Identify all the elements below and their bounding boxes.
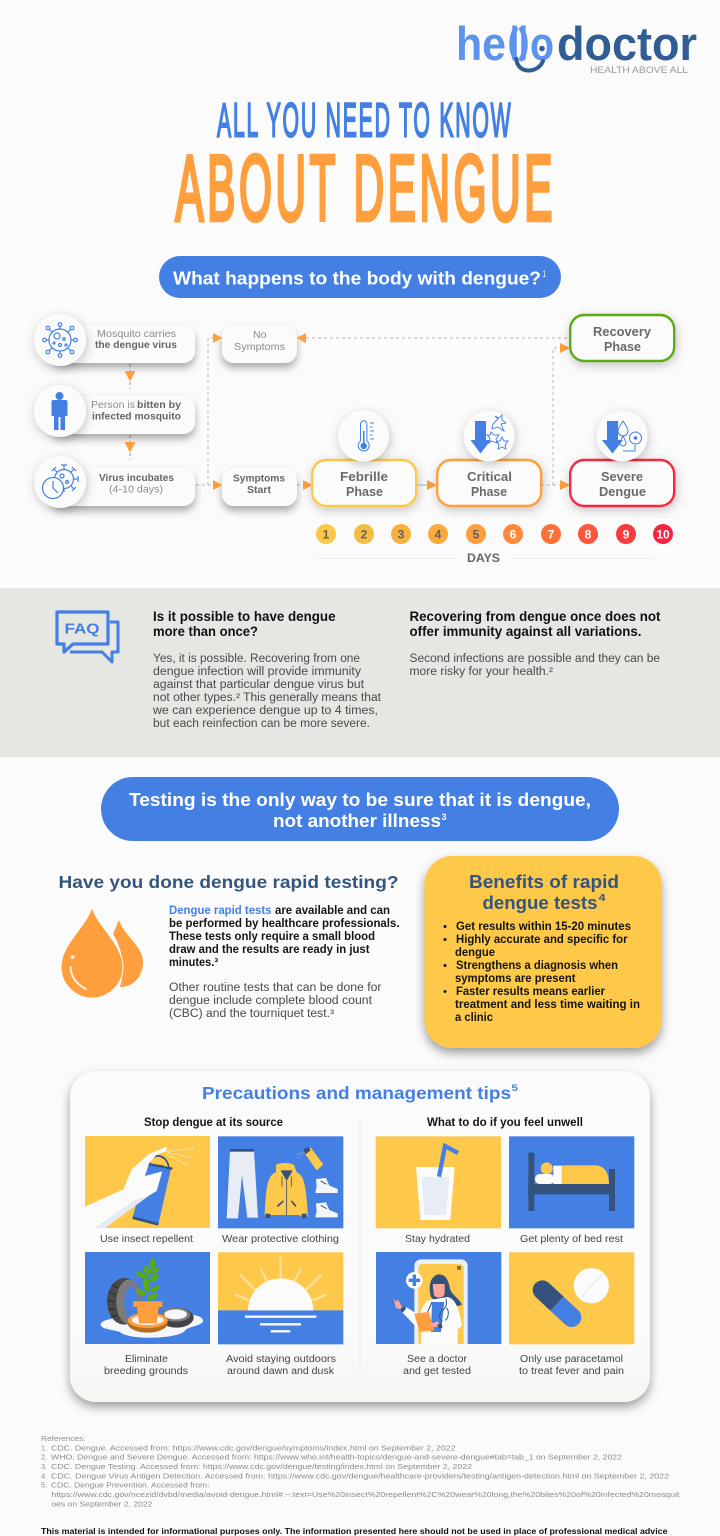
tile: breeding grounds [85, 1252, 210, 1377]
panel: FAQ [0, 588, 720, 757]
icon: FAQ speech bubbles [57, 612, 118, 662]
bullet list: Faster results means earlier [456, 986, 606, 998]
icon: person [52, 392, 68, 430]
heading: rapid testing: Have you done dengue rapid testing? [58, 872, 398, 892]
subheading: feel unwell: What to do if you feel unwell [427, 1117, 583, 1129]
text: rapid tests description: Dengue rapid tests [169, 905, 272, 917]
heading pill: what happens to the body [159, 256, 561, 298]
flowchart: connectors and arrows [130, 338, 570, 485]
FAQ question text: we can experience dengue up to 4 times, [152, 705, 378, 717]
text: rapid tests description [169, 905, 400, 1020]
bullet list: Strengthens a diagnosis when [456, 960, 618, 972]
references: https://www.cdc.gov/ncezid/dvbd/media/avoid-dengue.html#:~:text=Use%20insect%20repellent%2C%20wear%20long,the%20bites%20of%20infected%20mosquit [51, 1490, 680, 1499]
tile: bed rest: Get plenty of bed rest [520, 1233, 623, 1245]
references: CDC. Dengue. Accessed from: https://www.cdc.gov/dengue/symptoms/index.html on September 2, 2022 [51, 1443, 456, 1452]
card: person bitten: infected mosquito [92, 410, 181, 422]
logo: hellodoctor [456, 17, 697, 76]
text: rapid tests description: Other routine tests that can be done for [169, 982, 382, 994]
heading pill: what happens to the body: 1 [542, 269, 546, 279]
tile: paracetamol [509, 1252, 634, 1377]
days timeline [316, 524, 673, 565]
references: WHO. Dengue and Severe Dengue. Accessed from: https://www.who.int/health-topics/dengue-and-severe-dengue#tab=tab_1 on September 2, 2022 [51, 1453, 622, 1462]
FAQ answer text: offer immunity against all variations. [410, 624, 642, 639]
box: severe dengue: Severe [601, 469, 643, 484]
FAQ question text: against that particular dengue virus but [153, 679, 365, 691]
arrows: orange flow heads [213, 333, 570, 490]
tile: paracetamol: Only use paracetamol [520, 1353, 623, 1365]
days timeline: 2 [361, 527, 368, 541]
heading: precautions: 5 [512, 1083, 519, 1094]
disclaimer: This material is intended for informational purposes only. The information presented here should not be used in place of professional medical advice [41, 1526, 668, 1536]
tile: stay hydrated: Stay hydrated [405, 1233, 470, 1245]
heading pill: testing: 3 [442, 812, 446, 822]
days timeline: 3 [398, 527, 405, 541]
card: virus incubates: (4-10 days) [109, 484, 163, 496]
logo: hellodoctor: doctor [557, 17, 697, 70]
tile: bed rest [509, 1136, 634, 1245]
bullet list [444, 921, 640, 1024]
icon: virus and clock [42, 465, 78, 498]
FAQ answer text: more risky for your health.² [410, 666, 553, 678]
card: no symptoms: No [253, 329, 267, 341]
logo: hellodoctor: ll [510, 17, 528, 70]
references: CDC. Dengue Virus Antigen Detection. Accessed from: https://www.cdc.gov/dengue/healthcare-providers/testing/antigen-detection.html on September 2, 2022 [51, 1471, 669, 1480]
days timeline: 7 [548, 527, 555, 541]
tile: dawn and dusk: around dawn and dusk [227, 1365, 335, 1377]
FAQ question text: Yes, it is possible. Recovering from one [153, 653, 360, 665]
references: References: [41, 1434, 86, 1443]
card: person bitten: bitten by [137, 399, 181, 411]
box: severe dengue: Dengue [599, 484, 646, 499]
tile: protective clothing: Wear protective clothing [222, 1233, 339, 1245]
bullet list: Get results within 15-20 minutes [456, 921, 631, 933]
text: rapid tests description: draw and the results are ready in just [169, 944, 370, 956]
references [41, 1434, 680, 1508]
FAQ answer text: Second infections are possible and they can be [410, 653, 660, 665]
box: recovery phase [570, 315, 674, 361]
tile: paracetamol: to treat fever and pain [519, 1365, 624, 1377]
box: recovery phase: Phase [604, 339, 641, 354]
FAQ question text: but each reinfection can be more severe. [153, 718, 370, 730]
tile: insect repellent: Use insect repellent [100, 1233, 193, 1245]
text: rapid tests description: be performed by healthcare professionals. [169, 918, 400, 930]
heading: precautions: Precautions and management tips [202, 1083, 511, 1103]
days timeline: 6 [510, 527, 517, 541]
tile: dawn and dusk [218, 1252, 343, 1377]
panel: benefits of rapid dengue tests: 4 [598, 893, 606, 904]
icon: blood pressure falling [596, 410, 648, 462]
box: critical phase: Phase [471, 484, 507, 499]
FAQ question text: not other types.² This generally means that [153, 692, 382, 704]
card: no symptoms [222, 325, 297, 363]
text: rapid tests description: dengue include complete blood count [169, 995, 373, 1007]
card: symptoms start: Start [247, 484, 271, 496]
icon: thermometer [338, 410, 389, 462]
references: 5. [41, 1481, 47, 1490]
arrow: down 2 [124, 442, 136, 452]
box: febrille phase [312, 460, 416, 506]
text: rapid tests description: minutes.³ [169, 957, 218, 969]
tile: protective clothing [218, 1136, 343, 1245]
heading pill: testing: not another illness [273, 811, 441, 831]
text: rapid tests description: are available and can [275, 905, 390, 917]
references: CDC. Dengue Prevention. Accessed from: [51, 1481, 210, 1490]
tile: breeding grounds: breeding grounds [104, 1365, 188, 1377]
days timeline: 1 [323, 527, 330, 541]
icon: dengue virus [43, 323, 77, 357]
box: critical phase: Critical [467, 469, 512, 484]
logo: hellodoctor: he [456, 17, 506, 70]
box: severe dengue [570, 460, 674, 506]
panel: benefits of rapid dengue tests [424, 856, 662, 1048]
days timeline: 4 [435, 527, 442, 541]
card: mosquito carries the virus [34, 314, 195, 366]
days timeline: 10 [656, 527, 670, 541]
tile: see a doctor: and get tested [403, 1365, 471, 1377]
FAQ question text: Is it possible to have dengue [153, 609, 336, 624]
box: recovery phase: Recovery [593, 324, 652, 339]
panel: benefits of rapid dengue tests: dengue tests [482, 892, 598, 913]
box: febrille phase: Phase [346, 484, 383, 499]
card: symptoms start [222, 468, 297, 506]
references: 4. [41, 1471, 47, 1480]
heading pill: testing [101, 777, 619, 841]
logo: hellodoctor: o [530, 17, 554, 70]
title [176, 94, 556, 240]
bullet list: treatment and less time waiting in [455, 999, 640, 1011]
references: CDC. Dengue Testing. Accessed from: https://www.cdc.gov/dengue/testing/index.html on September 2, 2022 [51, 1462, 472, 1471]
tile: stay hydrated [376, 1136, 501, 1245]
tile: dawn and dusk: Avoid staying outdoors [226, 1353, 336, 1365]
arrow: down 1 [124, 371, 136, 382]
references: oes on September 2, 2022 [51, 1500, 152, 1508]
box: febrille phase: Febrille [340, 469, 388, 484]
references: 3. [41, 1462, 47, 1471]
card: symptoms start: Symptoms [233, 472, 285, 484]
box: critical phase [437, 460, 541, 506]
panel: benefits of rapid dengue tests: Benefits of rapid [469, 871, 619, 892]
references: 1. [41, 1443, 47, 1452]
FAQ answer text: Recovering from dengue once does not [410, 609, 661, 624]
tile: see a doctor [376, 1252, 501, 1377]
icon: platelets falling [464, 410, 514, 462]
bullet list: a clinic [455, 1012, 494, 1024]
panel: precautions and management tips [70, 1071, 650, 1402]
FAQ question text: more than once? [153, 624, 258, 639]
heading pill: testing: Testing is the only way to be sure that it is dengue, [129, 790, 591, 810]
FAQ question text [152, 609, 382, 730]
subheading: stop dengue: Stop dengue at its source [144, 1117, 283, 1129]
FAQ question text: dengue infection will provide immunity [153, 666, 361, 678]
card: mosquito carries the virus: the dengue virus [95, 339, 177, 351]
text: rapid tests description: These tests only require a small blood [169, 931, 375, 943]
icon: blood drops [61, 907, 143, 998]
card: virus incubates: Virus incubates [99, 472, 174, 484]
references: 2. [41, 1453, 47, 1462]
card: person bitten: Person is [91, 399, 135, 411]
text: rapid tests description: (CBC) and the tourniquet test.³ [169, 1008, 334, 1020]
tile: breeding grounds: Eliminate [125, 1353, 168, 1365]
logo: hellodoctor: HEALTH ABOVE ALL [590, 65, 688, 76]
bullet list: dengue [455, 947, 495, 959]
card: virus incubates [34, 456, 195, 508]
card: no symptoms: Symptoms [234, 341, 285, 353]
heading pill: what happens to the body: What happens to the body with dengue? [173, 268, 541, 288]
tile: see a doctor: See a doctor [407, 1353, 467, 1365]
days timeline: DAYS [467, 553, 500, 565]
bullet list: symptoms are present [455, 973, 576, 985]
FAQ answer text [410, 609, 661, 678]
card: person bitten [34, 385, 195, 437]
card: mosquito carries the virus: Mosquito carries [97, 328, 176, 340]
days timeline: 5 [473, 527, 480, 541]
days timeline: 9 [623, 527, 630, 541]
bullet list: Highly accurate and specific for [456, 934, 628, 946]
days timeline: 8 [585, 527, 592, 541]
icon: FAQ speech bubbles: FAQ [64, 622, 100, 638]
tile: insect repellent [85, 1136, 210, 1245]
